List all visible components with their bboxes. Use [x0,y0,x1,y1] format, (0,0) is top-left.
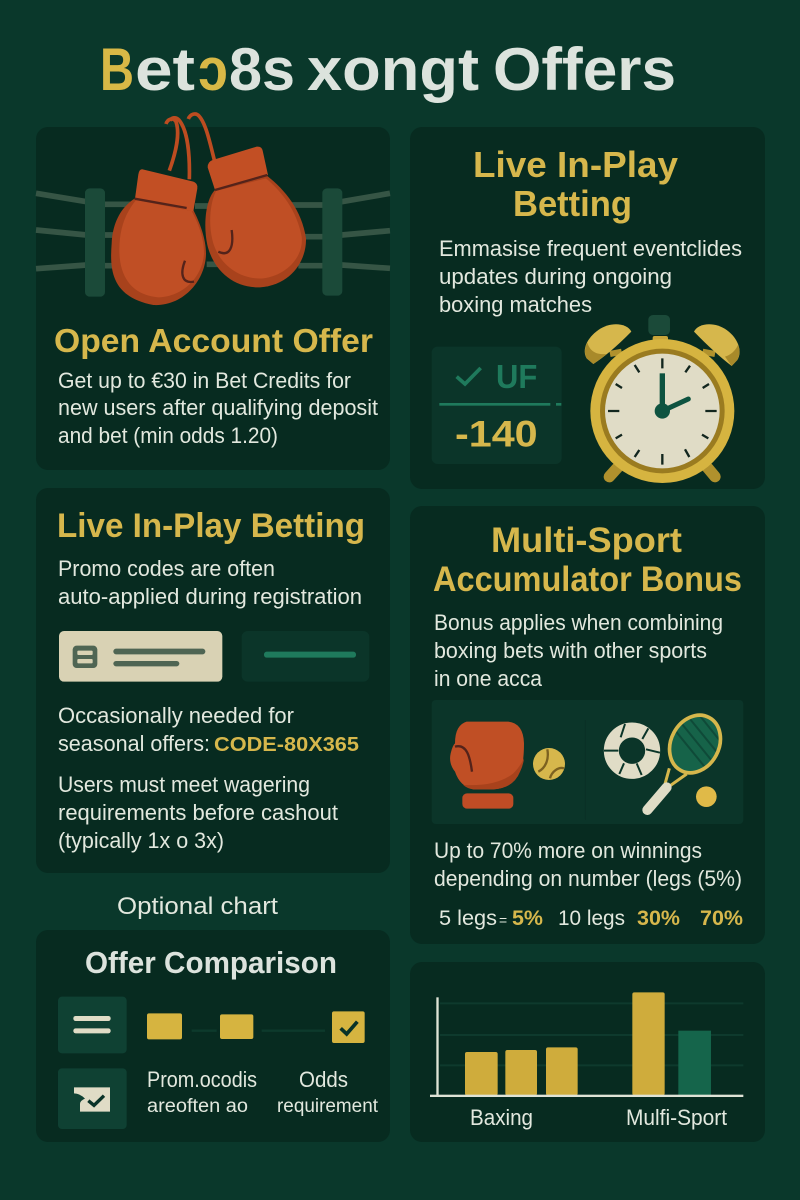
axis label: boxing: Baxing [470,1105,533,1130]
text block: Up to 70% more on winnings [434,838,702,863]
icon: tennis racket and ball [647,703,730,810]
text block [58,556,362,609]
text block: Bonus applies when combining [434,610,723,635]
promo code cards [59,631,369,682]
heading [433,521,742,599]
left glove [111,198,206,305]
text block: seasonal offers: seasonal offers: [58,731,210,756]
title: et [135,36,195,103]
text block: depending on number (legs (5%) [434,866,742,891]
label: optional chart: Optional chart [117,893,278,920]
text block: updates during ongoing [439,264,672,289]
heading [473,144,678,224]
heading: Offer Comparison [85,945,337,980]
heading: Live In-Play Betting [57,507,365,545]
panel: open account offer [36,114,390,470]
comparison icons [58,997,365,1129]
text block [58,368,378,448]
icon: lifebuoy ball [604,724,660,775]
legs bonus values [439,907,743,930]
text block: boxing bets with other sports [434,638,707,663]
title [100,36,676,103]
heading: Live In-Play [473,144,678,185]
text block: seasonal offers: CODE-80X365 [214,734,359,756]
text block: Emmasise frequent eventclides [439,236,742,261]
legs bonus values: = [499,912,507,928]
panel: bar chart [410,962,765,1142]
text block: and bet (min odds 1.20) [58,423,278,448]
illustration: boxing gloves in ring [36,114,390,305]
text block: Get up to €30 in Bet Credits for [58,368,351,393]
bar chart [430,992,743,1097]
odds scoreboard [432,347,562,464]
text block: wagering: Users must meet wagering [58,772,310,797]
heading: Accumulator Bonus [433,560,742,599]
column: odds requirement: requirement [277,1096,379,1117]
column: promo codes: Prom.ocodis [147,1067,257,1092]
panel: offer comparison [36,930,390,1142]
legs bonus values: 10 legs [558,907,625,930]
axis label: multi-sport: Mulfi-Sport [626,1105,727,1130]
text block: seasonal offers: Occasionally needed for [58,703,294,728]
text block: new users after qualifying deposit [58,395,378,420]
heading: Open Account Offer [54,322,373,359]
panel: promo codes [36,488,390,873]
panel: live in-play betting clock [410,127,765,489]
text block: wagering [58,772,338,853]
text block: seasonal offers [58,703,359,756]
column: promo codes: areoften ao [147,1096,248,1117]
title: 8s [229,36,295,103]
icon: tennis ball [533,748,565,780]
column: odds requirement: Odds [299,1067,348,1092]
odds scoreboard: -140 [455,413,538,455]
right glove [205,176,306,287]
icon: boxing glove [450,722,524,809]
text block [434,610,723,691]
column: odds requirement [277,1067,379,1117]
text block: boxing matches [439,292,592,317]
sports icons [432,700,743,824]
text block [434,838,742,891]
legs bonus values: 5% [512,907,543,930]
text block: Promo codes are often [58,556,275,581]
text block: auto-applied during registration [58,584,362,609]
title: xongt [307,36,479,103]
text block: wagering: requirements before cashout [58,800,338,825]
legs bonus values: 5 legs [439,907,497,930]
panel: multi-sport accumulator bonus [410,506,765,944]
icon: alarm clock [585,315,740,483]
odds scoreboard: UF [496,359,537,396]
text block: in one acca [434,666,543,691]
text block: wagering: (typically 1x o 3x) [58,828,224,853]
text block [439,236,742,317]
legs bonus values: 30% [637,907,680,930]
column: promo codes [147,1067,257,1117]
heading: Multi-Sport [491,521,682,560]
heading: Betting [513,183,632,224]
title: ɔ [198,36,228,103]
title: B [100,36,134,103]
title: Offers [493,36,676,103]
legs bonus values: 70% [700,907,743,930]
